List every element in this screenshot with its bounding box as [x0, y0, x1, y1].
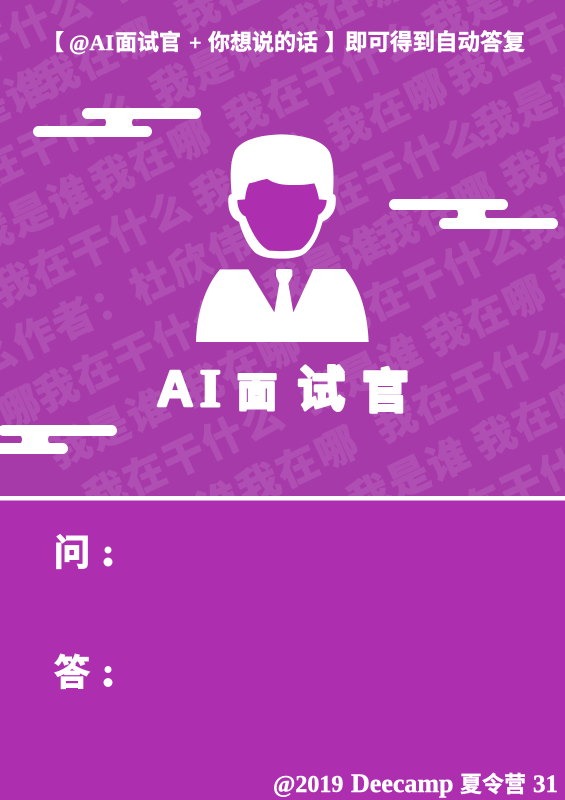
- instruction heading: 面试官: [115, 30, 181, 55]
- answer label: 答: [54, 652, 90, 693]
- footer credit: @2019: [273, 772, 343, 798]
- face: [237, 179, 327, 251]
- icon: interviewer figure: [196, 134, 369, 342]
- instruction heading: 】: [325, 30, 347, 55]
- question label: 问: [54, 532, 90, 573]
- title: 面: [237, 371, 277, 415]
- watermark text pattern: 我在干什么: [218, 12, 432, 144]
- icon: cloud right: [389, 199, 558, 229]
- icon: cloud top left: [33, 108, 201, 137]
- instruction heading: 你想说的话: [208, 30, 318, 55]
- watermark text pattern: 我在干什么: [319, 215, 533, 347]
- watermark text pattern: 作者：杜欣伟: [6, 217, 260, 368]
- watermark text pattern: 我是谁: [113, 473, 249, 570]
- watermark text pattern: 我是谁: [42, 381, 178, 477]
- footer credit: 31: [533, 771, 558, 798]
- title: [157, 360, 409, 418]
- title: A: [157, 361, 193, 417]
- watermark text pattern: 我是谁: [144, 20, 280, 116]
- footer credit: Deecamp: [351, 769, 454, 798]
- watermark text pattern: 我是谁: [342, 429, 478, 526]
- icon: cloud lower left: [0, 425, 117, 454]
- watermark text pattern: 我在哪: [84, 111, 220, 207]
- watermark text pattern: 我在干什么: [278, 108, 492, 241]
- title: I: [200, 360, 221, 418]
- watermark text pattern: 我在干什么: [78, 390, 292, 523]
- instruction heading: +: [189, 30, 202, 55]
- answer label: [54, 652, 112, 693]
- panel: upper background: [0, 0, 565, 497]
- watermark text pattern: 我在干什么: [29, 288, 243, 420]
- instruction heading: 【: [42, 30, 64, 55]
- footer credit: 夏令营: [460, 772, 526, 797]
- suit: [196, 269, 369, 342]
- watermark text pattern: 我是谁: [185, 125, 322, 221]
- watermark text pattern: 我在哪: [418, 268, 555, 364]
- watermark text pattern: 我是谁: [256, 218, 392, 314]
- divider line: [0, 496, 565, 500]
- watermark text pattern: 我在哪: [368, 165, 505, 262]
- head outline: [228, 134, 336, 259]
- title: 官: [362, 365, 409, 418]
- title: 试: [297, 364, 345, 417]
- watermark text pattern: [0, 0, 565, 496]
- question label: [54, 532, 112, 573]
- watermark text pattern: 我在哪: [320, 62, 457, 158]
- panel: lower answer area: [0, 500, 565, 800]
- watermark text pattern: 我是谁: [293, 326, 430, 422]
- watermark text pattern: 我在哪: [230, 418, 367, 515]
- instruction heading: 即可得到自动答复: [345, 30, 525, 55]
- instruction heading: @AI: [69, 30, 114, 55]
- watermark text pattern: 我在哪: [29, 10, 165, 106]
- watermark text pattern: 我在哪: [173, 319, 310, 416]
